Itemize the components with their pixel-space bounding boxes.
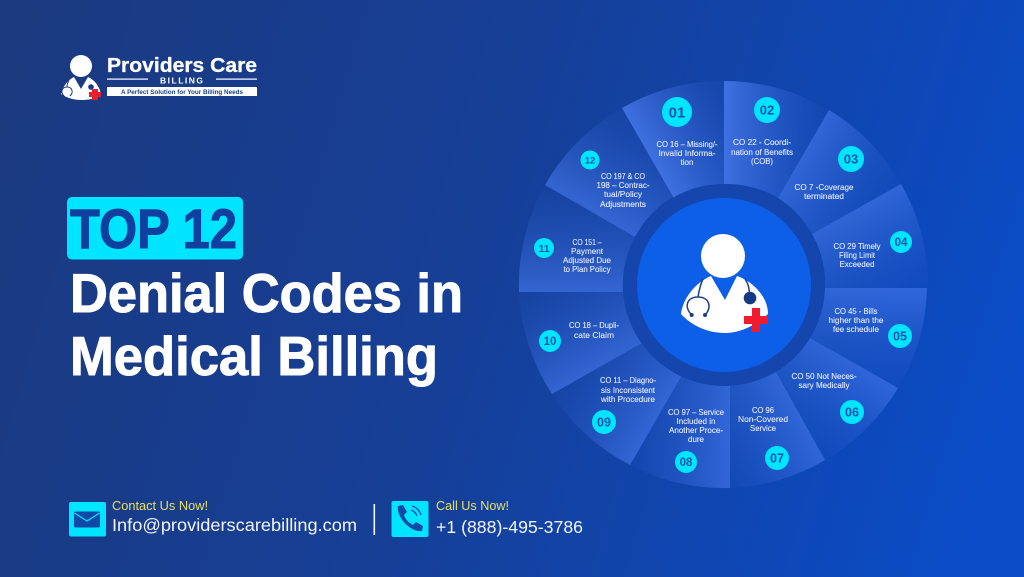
wheel segment 05: CO 45 - Bills bbox=[834, 306, 878, 316]
icon: phone bbox=[392, 501, 428, 537]
wheel segment 06: 06 bbox=[845, 406, 859, 420]
wheel segment 12: tual/Policy bbox=[604, 189, 643, 199]
call label: Call Us Now! bbox=[436, 499, 509, 513]
wheel segment 08: 08 bbox=[680, 457, 693, 469]
wheel segment 05: 05 bbox=[893, 330, 907, 344]
email address: Info@providerscarebilling.com bbox=[112, 515, 357, 535]
title bbox=[67, 197, 463, 387]
wheel segment 05: higher than the bbox=[828, 315, 884, 325]
wheel segment 04: Filing Limit bbox=[839, 250, 876, 260]
wheel segment 11: CO 151 – bbox=[572, 237, 602, 247]
divider bbox=[374, 504, 375, 535]
logo tagline bbox=[107, 87, 257, 96]
wheel segment 10 bbox=[519, 292, 642, 394]
wheel segment 06 bbox=[776, 338, 898, 460]
phone number: +1 (888)-495-3786 bbox=[436, 517, 583, 537]
center hub bbox=[623, 184, 825, 386]
wheel segment 06: sary Medically bbox=[798, 380, 850, 390]
title badge: TOP 12: TOP 12 bbox=[70, 197, 237, 260]
wheel segment 11: 11 bbox=[538, 243, 550, 255]
wheel segment 09: sis Inconsistent bbox=[601, 385, 656, 395]
wheel segment 01: CO 16 – Missing/- bbox=[656, 139, 718, 149]
wheel segment 02: nation of Benefits bbox=[731, 147, 793, 157]
wheel segment 06: CO 50 Not Neces- bbox=[792, 371, 857, 381]
wheel segment 10: cate Claim bbox=[574, 330, 614, 340]
wheel segment 12 bbox=[545, 108, 673, 237]
wheel segment 01: tion bbox=[680, 157, 694, 167]
wheel segment 03: 03 bbox=[844, 152, 858, 166]
contact label: Contact Us Now! bbox=[112, 499, 208, 513]
title line 1: Denial Codes in bbox=[70, 263, 463, 324]
logo subtitle: BILLING bbox=[160, 76, 203, 86]
wheel segment 09: 09 bbox=[597, 416, 611, 430]
icon: envelope bbox=[69, 502, 106, 536]
wheel segment 03: terminated bbox=[804, 191, 844, 201]
wheel segment 10: CO 18 – Dupli- bbox=[569, 320, 619, 330]
wheel segment 08: dure bbox=[688, 434, 704, 444]
wheel segment 12: CO 197 & CO bbox=[601, 171, 645, 181]
wheel segment 01 bbox=[622, 81, 724, 198]
wheel segment 02: CO 22 - Coordi- bbox=[733, 137, 791, 147]
wheel segment 08 bbox=[630, 375, 730, 488]
wheel segment 04: CO 29 Timely bbox=[834, 241, 881, 251]
wheel segment 12: 12 bbox=[585, 156, 595, 166]
contact: phone bbox=[392, 499, 583, 537]
title line 2: Medical Billing bbox=[70, 326, 438, 387]
wheel segment 09 bbox=[552, 343, 682, 465]
wheel segment 11: Payment bbox=[571, 246, 604, 256]
wheel segment 04: Exceeded bbox=[840, 259, 875, 269]
wheel segment 07: 07 bbox=[770, 452, 784, 466]
wheel segment 11: Adjusted Due bbox=[563, 255, 611, 265]
wheel segment 09: CO 11 – Diagno- bbox=[600, 375, 656, 385]
icon: doctor bbox=[681, 234, 768, 333]
wheel segment 12: Adjustments bbox=[600, 199, 646, 209]
wheel segment 01: 01 bbox=[669, 104, 685, 122]
wheel diagram bbox=[519, 81, 928, 488]
wheel segment 11 bbox=[519, 185, 635, 292]
wheel segment 08: CO 97 – Service bbox=[668, 407, 724, 417]
wheel segment 02: (COB) bbox=[751, 156, 773, 166]
wheel segment 03 bbox=[778, 110, 901, 234]
wheel segment 03: CO 7 -Coverage bbox=[794, 182, 854, 192]
wheel segment 08: Included in bbox=[676, 416, 716, 426]
wheel segment 07: Service bbox=[750, 423, 776, 433]
wheel segment 11: to Plan Policy bbox=[564, 264, 611, 274]
logo name: Providers Care bbox=[107, 55, 257, 77]
wheel segment 12: 198 – Contrac- bbox=[596, 180, 650, 190]
wheel segment 07 bbox=[730, 372, 825, 488]
wheel segment 05 bbox=[810, 288, 927, 388]
wheel segment 08: Another Proce- bbox=[669, 425, 723, 435]
wheel segment 01: Invalid Informa- bbox=[658, 148, 716, 158]
logo tagline: A Perfect Solution for Your Billing Needs bbox=[121, 89, 243, 96]
wheel segment 02: 02 bbox=[760, 102, 774, 118]
wheel segment 04 bbox=[812, 184, 928, 288]
logo icon: doctor bbox=[61, 55, 101, 100]
wheel segment 07: CO 96 bbox=[752, 405, 774, 415]
logo bbox=[61, 55, 257, 100]
contact: email bbox=[69, 499, 357, 536]
wheel segment 05: fee schedule bbox=[833, 324, 879, 334]
wheel segment 02 bbox=[724, 81, 829, 198]
wheel segment 10: 10 bbox=[544, 336, 556, 348]
wheel segment 09: with Procedure bbox=[600, 394, 655, 404]
wheel segment 04: 04 bbox=[895, 237, 908, 249]
wheel segment 07: Non-Covered bbox=[738, 414, 788, 424]
